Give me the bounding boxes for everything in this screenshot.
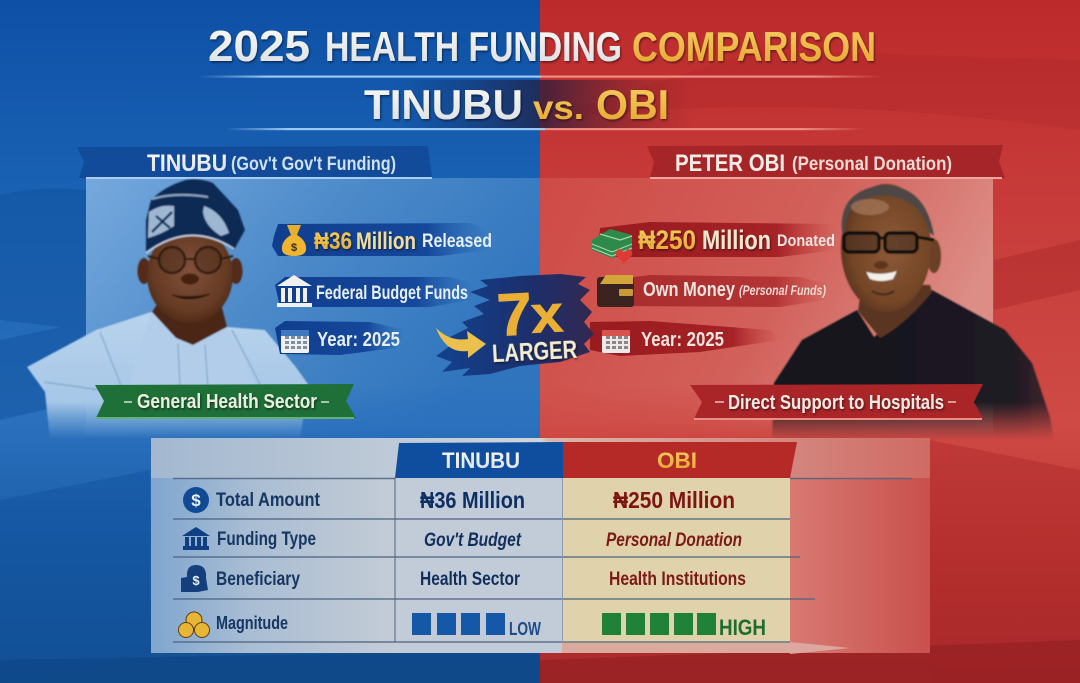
row: 36 million released: Million [356,228,416,255]
title: 2025 health funding comparison: HEALTH FUNDING [325,23,622,70]
ribbon: direct support to hospitals [690,384,983,420]
row: own money personal funds [597,275,830,307]
icon: wallet [597,275,634,307]
portrait: Tinubu [27,179,308,440]
ribbon: Obi heading: PETER OBI [675,150,785,177]
table header: Tinubu [395,442,563,478]
subtitle: Tinubu vs. Obi [364,81,669,128]
subtitle: Tinubu vs. Obi: TINUBU [364,81,523,128]
row: 250 million donated: Million [702,225,771,255]
row: 36 million released: ₦36 [314,228,352,255]
icon: gold coin bags [178,612,210,638]
row: 250 million donated: ₦250 [638,225,696,255]
subtitle: Tinubu vs. Obi: vs. [533,89,584,126]
row: 36 million released [272,223,492,256]
ribbon: Tinubu heading [77,146,432,179]
icon: cash stack with heart [592,229,632,264]
row: 36 million released: Released [422,231,492,252]
table header: Tinubu: TINUBU [442,448,520,473]
ribbon: Obi heading [647,145,1005,179]
subtitle: Tinubu vs. Obi: OBI [596,81,669,128]
bars: low magnitude [412,613,505,635]
title: 2025 health funding comparison: 2025 [208,22,310,71]
row: funding type [182,527,742,551]
panel: Obi backdrop [540,178,993,438]
background: blue half [0,0,540,683]
icon: money bag [282,225,306,256]
row: total amount: ₦250 Million [613,487,735,513]
row: own money personal funds: (Personal Funds) [739,282,826,298]
ribbon: Tinubu heading: TINUBU [147,150,227,177]
ribbon: general health sector: General Health Sector [137,391,317,413]
row: total amount [183,487,735,513]
bars: high magnitude [602,613,716,635]
callout: 7x larger: 7 [495,280,534,349]
ribbon: direct support to hospitals: Direct Support to Hospitals [728,392,944,414]
row: year 2025 [275,321,406,355]
icon: dollar coin [183,487,209,513]
title: 2025 health funding comparison [208,22,876,71]
row: beneficiary [181,565,746,592]
icon: bank building [277,275,312,307]
row: magnitude: LOW [509,619,541,639]
callout: 7x larger: x [530,285,565,345]
callout: 7x larger: LARGER [491,336,578,368]
ribbon: Tinubu heading: (Gov't Gov't Funding) [231,154,396,175]
icon: person with dollar [181,565,208,592]
icon: dollar coin: $ [191,491,201,510]
row: 250 million donated: Donated [777,231,835,250]
callout: 7x larger [436,274,594,376]
background: red half [540,0,1080,683]
row: magnitude [178,612,766,640]
table header: Obi: OBI [657,448,697,473]
row: federal budget funds: Federal Budget Funds [316,283,468,304]
row: federal budget funds [275,275,476,307]
row: year 2025 (Obi) [590,321,780,356]
row: year 2025: Year: 2025 [317,329,400,351]
table header: Obi [563,442,797,478]
row: beneficiary: Health Institutions [609,569,746,590]
row: total amount: ₦36 Million [420,487,525,513]
ribbon: general health sector [95,384,356,419]
icon: calendar [281,330,309,353]
icon: calendar [602,330,630,353]
row: own money personal funds: Own Money [643,279,736,301]
portrait: Obi [772,184,1054,440]
row: year 2025 (Obi): Year: 2025 [641,329,724,351]
comparison table [151,438,930,654]
icon: money bag: $ [291,242,297,254]
panel: Tinubu backdrop [86,178,540,410]
row: magnitude: HIGH [719,615,766,640]
arrow: pointing to the 7x figure [436,328,486,358]
ribbon: Obi heading: (Personal Donation) [792,154,952,175]
row: funding type: Gov't Budget [424,530,522,551]
icon: bank [182,527,210,550]
icon: person with dollar: $ [192,573,200,588]
row: beneficiary: Beneficiary [216,569,300,590]
row: funding type: Funding Type [217,529,316,550]
row: beneficiary: Health Sector [420,569,520,590]
row: 250 million donated [592,222,836,264]
row: magnitude: Magnitude [216,613,288,633]
row: total amount: Total Amount [216,490,321,511]
title: 2025 health funding comparison: COMPARISON [632,23,876,70]
row: funding type: Personal Donation [606,530,742,551]
